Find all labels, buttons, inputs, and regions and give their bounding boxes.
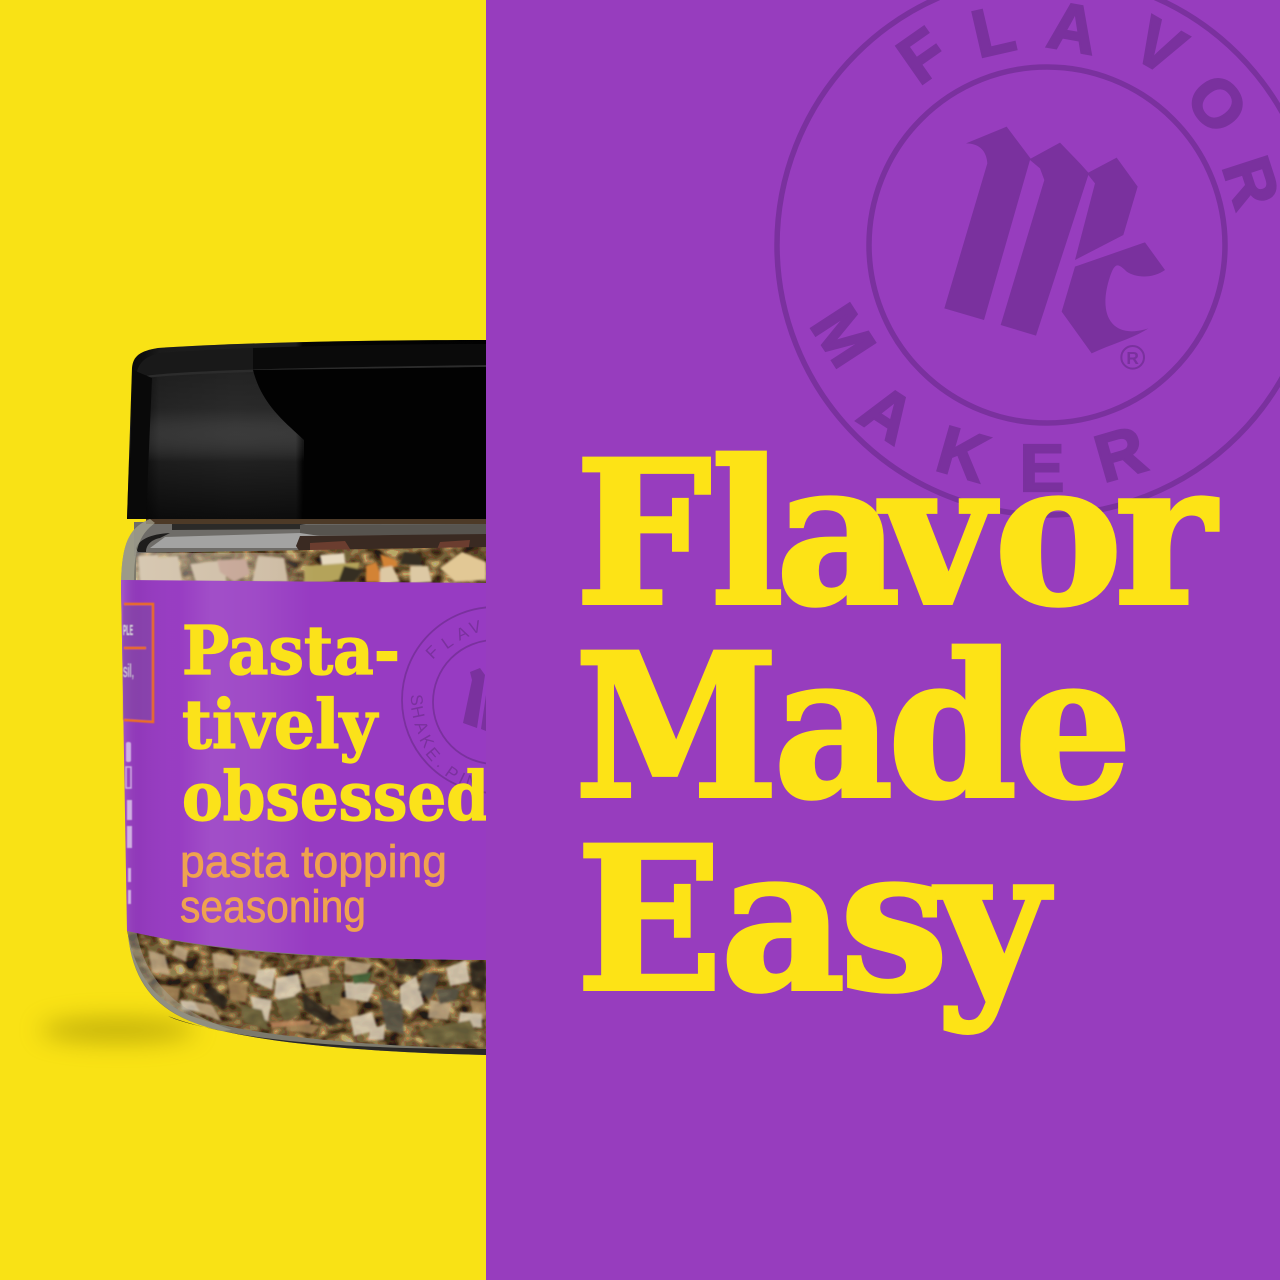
- product jar: [121, 340, 486, 1055]
- lid rim highlight: [146, 365, 486, 378]
- seal McCormick mark: [944, 127, 1165, 369]
- mini logo text: ·: [430, 756, 447, 774]
- lid reflection: [253, 367, 486, 458]
- seal letters: V: [1121, 3, 1198, 90]
- glass shoulder: [134, 522, 439, 556]
- orange callout box: PLE: [123, 622, 133, 639]
- label heading: [182, 624, 486, 822]
- seal letters: A: [846, 370, 928, 459]
- mini logo text: L: [438, 632, 457, 653]
- mini logo text: F: [422, 642, 443, 663]
- lid top band: [137, 358, 253, 375]
- main headline: [575, 418, 1218, 1037]
- registered mark: [1121, 346, 1144, 369]
- mini logo text: E: [422, 744, 444, 765]
- side panel icons: [126, 742, 132, 904]
- label heading: tively: [182, 685, 379, 764]
- glass jar body: [121, 519, 486, 1055]
- glass shoulder edge: [121, 519, 155, 580]
- mini logo mark: [463, 668, 486, 731]
- bottom flakes: [148, 945, 486, 1046]
- mini logo text: N: [463, 772, 481, 793]
- brown upper spice shade: [296, 534, 486, 552]
- seal letters: E: [1020, 431, 1064, 506]
- seal letters: K: [929, 412, 996, 497]
- lid left edge: [130, 372, 152, 466]
- seal letters: [796, 0, 1280, 506]
- top seasoning band: [136, 547, 486, 583]
- main headline: Made: [575, 611, 1132, 844]
- bottom rim: [168, 1016, 486, 1055]
- top flakes: [138, 552, 486, 584]
- purple label: [121, 580, 486, 960]
- glass highlight: [150, 533, 320, 548]
- neck right lines: [300, 524, 486, 535]
- black lid: [127, 340, 486, 519]
- label heading: obsessed: [182, 757, 489, 836]
- orange callout box: [123, 604, 153, 722]
- jar ground shadow: [40, 1018, 196, 1042]
- main headline: Flavor: [575, 418, 1218, 651]
- seal letters: O: [1171, 60, 1262, 148]
- mini logo text: P: [442, 762, 462, 784]
- label subheading: [180, 836, 447, 932]
- yellow background panel: [0, 0, 486, 1280]
- label subheading: seasoning: [180, 881, 366, 932]
- bottom seasoning band: [127, 931, 486, 1049]
- seal rings: [777, 0, 1280, 515]
- lid top band right: [253, 344, 486, 370]
- mini logo text: S: [407, 694, 426, 707]
- flavor maker seal: [777, 0, 1280, 515]
- mini logo text: I: [456, 769, 468, 788]
- label sheen: [121, 580, 281, 952]
- main headline: Easy: [576, 804, 1052, 1037]
- mini logo text: K: [416, 732, 438, 751]
- label heading: Pasta-: [182, 611, 400, 690]
- orange callout box: sil,: [123, 661, 134, 681]
- registered mark: R: [1126, 348, 1139, 368]
- neck dark line: [172, 524, 306, 530]
- mini logo text: A: [453, 622, 472, 644]
- purple background panel: [486, 0, 1280, 1280]
- milky glass wash: [136, 553, 306, 582]
- glass edge sheen: [128, 931, 232, 1031]
- mini logo text: H: [407, 704, 428, 720]
- mini logo text: V: [467, 617, 484, 638]
- mini logo text: A: [411, 718, 433, 737]
- mini logo text: [410, 620, 479, 784]
- seal letters: R: [1087, 412, 1154, 497]
- seal letters: M: [796, 292, 889, 380]
- speckled neck line: [146, 519, 486, 524]
- seal letters: F: [885, 14, 961, 99]
- label mini logo rings: [401, 606, 486, 794]
- glass dark arc: [136, 533, 170, 552]
- reddish flakes behind glass: [310, 540, 470, 550]
- label subheading: pasta topping: [180, 836, 447, 887]
